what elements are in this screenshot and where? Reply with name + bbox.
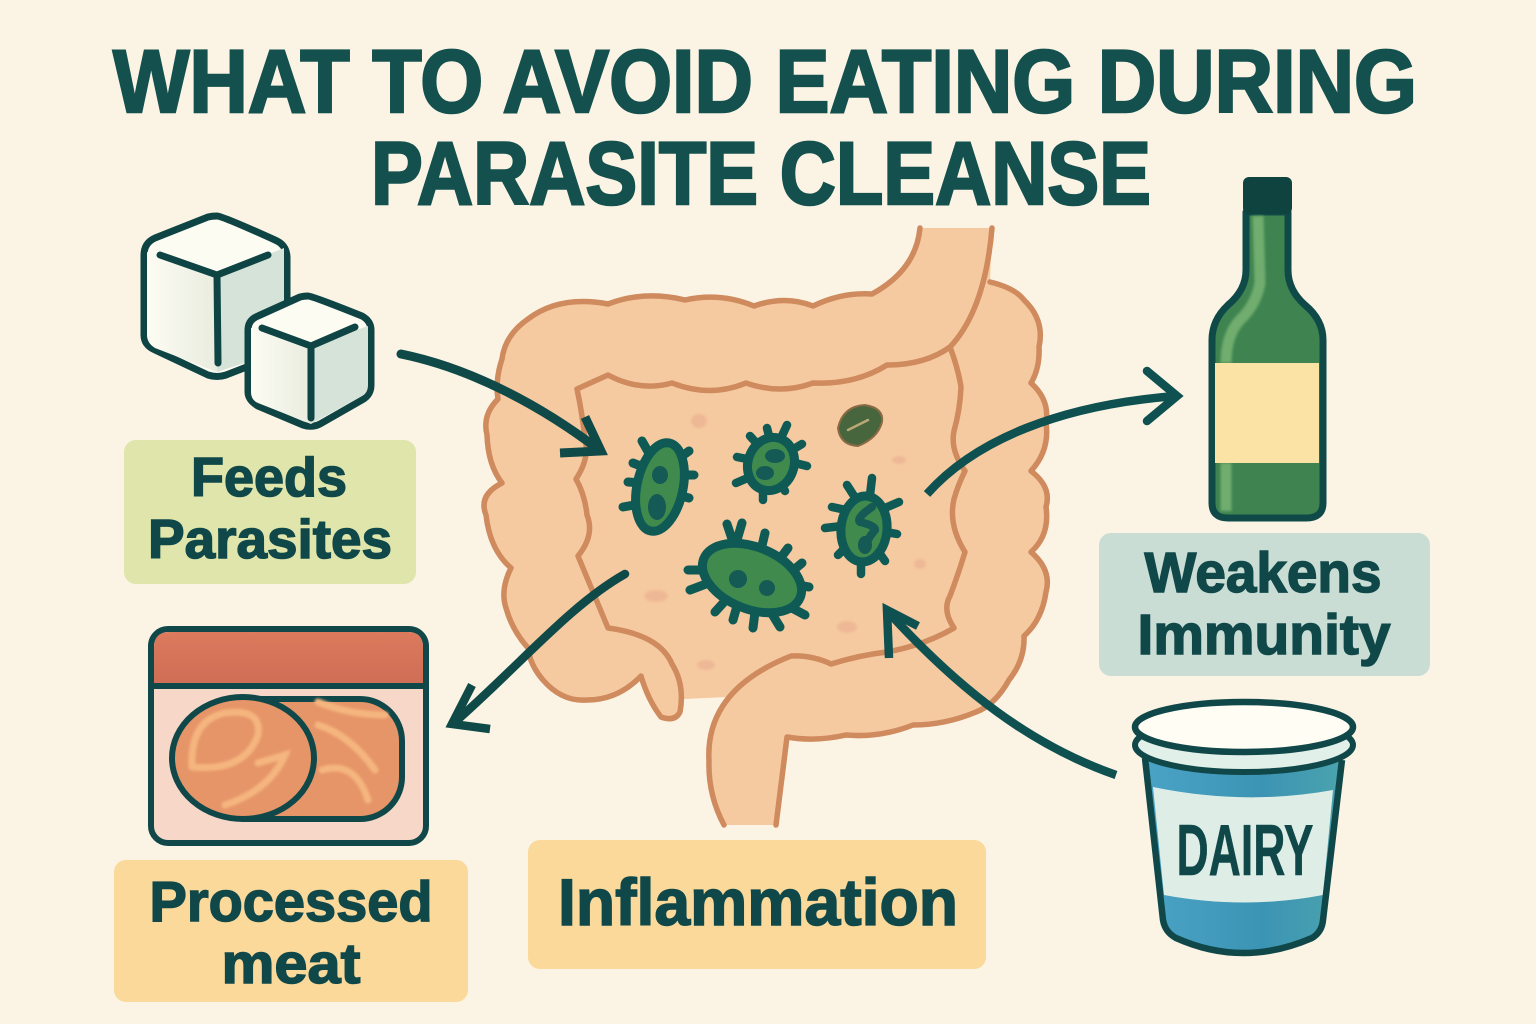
label: processed meat: Processed bbox=[150, 870, 432, 934]
label: processed meat bbox=[114, 860, 468, 1002]
label: inflammation: Inflammation bbox=[558, 865, 958, 939]
icon: intestine bbox=[484, 228, 1047, 825]
label: weakens immunity: Weakens bbox=[1144, 541, 1382, 605]
icon: parasite top centre bbox=[736, 425, 807, 500]
label: feeds parasites bbox=[124, 440, 416, 584]
arrow: intestine to bottle bbox=[927, 371, 1177, 494]
arrow: sugar to intestine bbox=[401, 354, 601, 453]
icon: parasite top left bbox=[623, 438, 694, 536]
icon: dark blob bbox=[838, 405, 882, 446]
icon: parasite right bbox=[825, 478, 899, 574]
icon: processed meat package bbox=[151, 629, 426, 843]
label: feeds parasites: Feeds bbox=[191, 446, 347, 508]
title: WHAT TO AVOID EATING DURING bbox=[113, 31, 1417, 131]
title: PARASITE CLEANSE bbox=[371, 123, 1151, 223]
icon: wine bottle bbox=[1212, 177, 1323, 518]
icon: dairy cup bbox=[1135, 702, 1353, 953]
title bbox=[113, 31, 1417, 223]
label: feeds parasites: Parasites bbox=[148, 508, 392, 570]
label: weakens immunity: Immunity bbox=[1138, 603, 1391, 667]
arrow: dairy to intestine bbox=[887, 610, 1116, 775]
label: inflammation bbox=[528, 840, 986, 969]
label: processed meat: meat bbox=[222, 932, 361, 996]
icon: sugar cubes bbox=[144, 216, 371, 426]
icon: dairy cup: DAIRY bbox=[1176, 811, 1314, 891]
arrow: intestine to processed meat bbox=[452, 574, 625, 729]
label: weakens immunity bbox=[1099, 533, 1430, 676]
icon: parasite bottom bbox=[688, 523, 812, 628]
